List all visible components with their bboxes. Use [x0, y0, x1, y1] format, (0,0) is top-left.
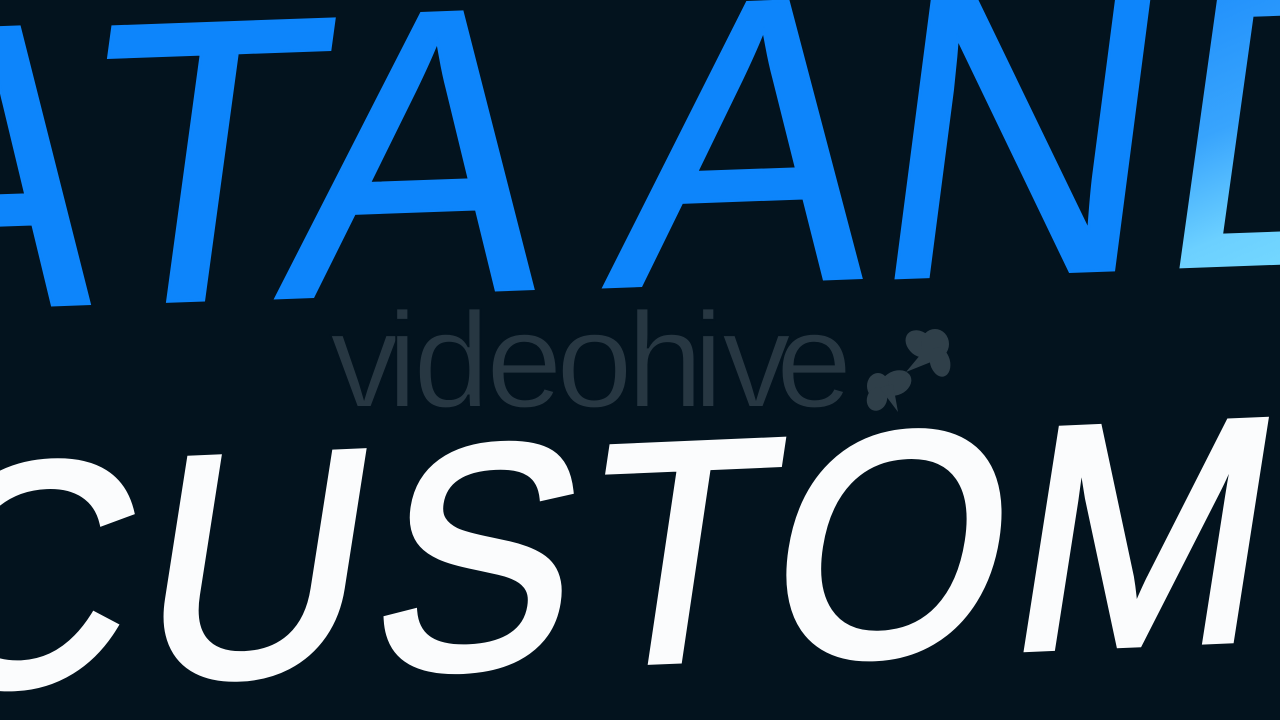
- icon: upper bee: [900, 325, 954, 379]
- watermark: videohive: videohive: [330, 285, 852, 437]
- heading: CUSTOM: O: [749, 361, 1038, 720]
- heading: CUSTOM: [0, 349, 1280, 720]
- heading: DATA AND: [0, 0, 1280, 400]
- icon: lower bee: [863, 365, 916, 414]
